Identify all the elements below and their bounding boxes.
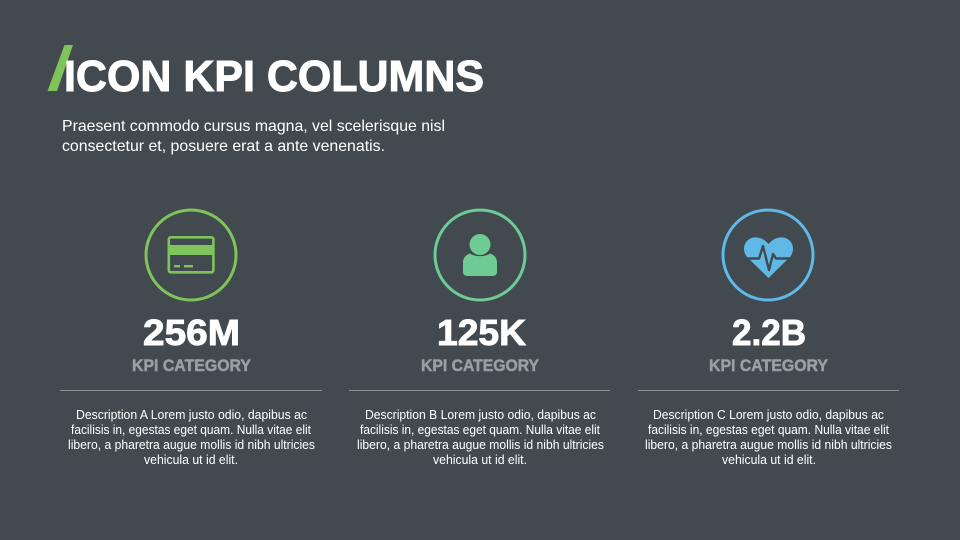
KPI category: KPI CATEGORY [132,356,252,375]
icon: heart with pulse in circle [723,210,813,300]
icon: person in circle [435,210,525,300]
description B: Description B Lorem justo odio, dapibus ac [365,408,596,422]
description A: facilisis in, egestas eget quam. Nulla vitae elit [71,423,312,437]
description A [68,408,315,467]
title: ICON KPI COLUMNS [64,52,484,101]
description C [645,408,892,467]
description A: libero, a pharetra augue mollis id nibh ultricies [68,438,315,452]
KPI value: 125K [437,312,526,353]
description C: facilisis in, egestas eget quam. Nulla vitae elit [648,423,890,437]
description C: vehicula ut id elit. [722,453,816,467]
description B: libero, a pharetra augue mollis id nibh ultricies [357,438,604,452]
subtitle [62,118,445,155]
KPI category: KPI CATEGORY [421,356,540,375]
panel: column B [349,210,610,467]
description B: vehicula ut id elit. [433,453,527,467]
KPI value: 256M [143,312,240,353]
panel: column A [60,210,322,467]
description B [357,408,604,467]
description A: vehicula ut id elit. [144,453,238,467]
subtitle: consectetur et, posuere erat a ante venenatis. [62,138,385,155]
KPI value: 2.2B [732,312,806,353]
icon: title slash accent [48,45,73,91]
subtitle: Praesent commodo cursus magna, vel scelerisque nisl [62,118,445,135]
panel: column C [638,210,899,467]
description C: libero, a pharetra augue mollis id nibh ultricies [645,438,892,452]
icon: credit card in circle [146,210,236,300]
description B: facilisis in, egestas eget quam. Nulla vitae elit [360,423,601,437]
description A: Description A Lorem justo odio, dapibus ac [76,408,307,422]
KPI category: KPI CATEGORY [709,356,829,375]
description C: Description C Lorem justo odio, dapibus ac [653,408,884,422]
